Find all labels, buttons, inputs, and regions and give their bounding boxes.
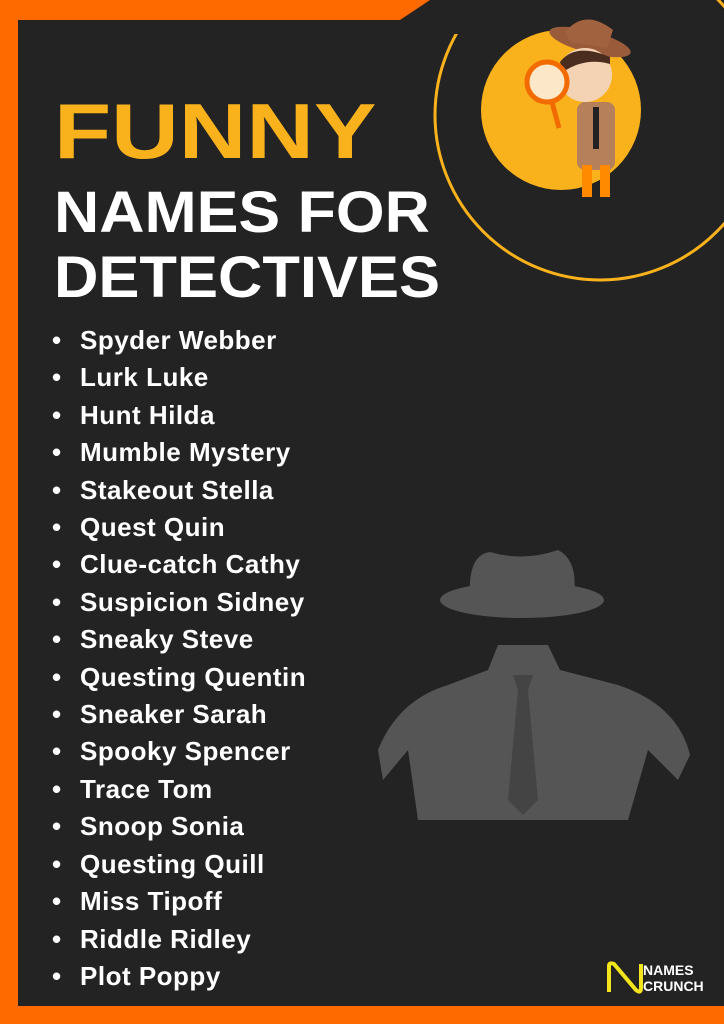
logo [607,961,704,994]
list of names: Spooky Spencer [80,736,291,766]
list of names: Clue-catch Cathy [80,549,300,579]
list of names: Mumble Mystery [80,437,291,467]
list of names: Riddle Ridley [80,924,251,954]
list of names: Quest Quin [80,512,225,542]
list of names: Snoop Sonia [80,811,244,841]
title [54,87,440,310]
list of names: Spyder Webber [80,325,277,355]
list of names [52,325,306,991]
list of names: Questing Quentin [80,662,306,692]
list of names: Stakeout Stella [80,475,274,505]
icon: detective in yellow circle with ring [434,0,724,282]
title: FUNNY [54,87,376,175]
list of names: Sneaky Steve [80,624,254,654]
list of names: Suspicion Sidney [80,587,305,617]
list of names: Miss Tipoff [80,886,222,916]
logo: CRUNCH [643,978,704,994]
list of names: Plot Poppy [80,961,221,991]
list of names: Sneaker Sarah [80,699,267,729]
logo: NAMES [643,962,694,978]
icon: detective silhouette [378,550,690,820]
list of names: Hunt Hilda [80,400,215,430]
list of names: Lurk Luke [80,362,209,392]
list of names: Trace Tom [80,774,213,804]
list of names: Questing Quill [80,849,265,879]
title: NAMES FOR [54,180,430,245]
title: DETECTIVES [54,245,440,310]
